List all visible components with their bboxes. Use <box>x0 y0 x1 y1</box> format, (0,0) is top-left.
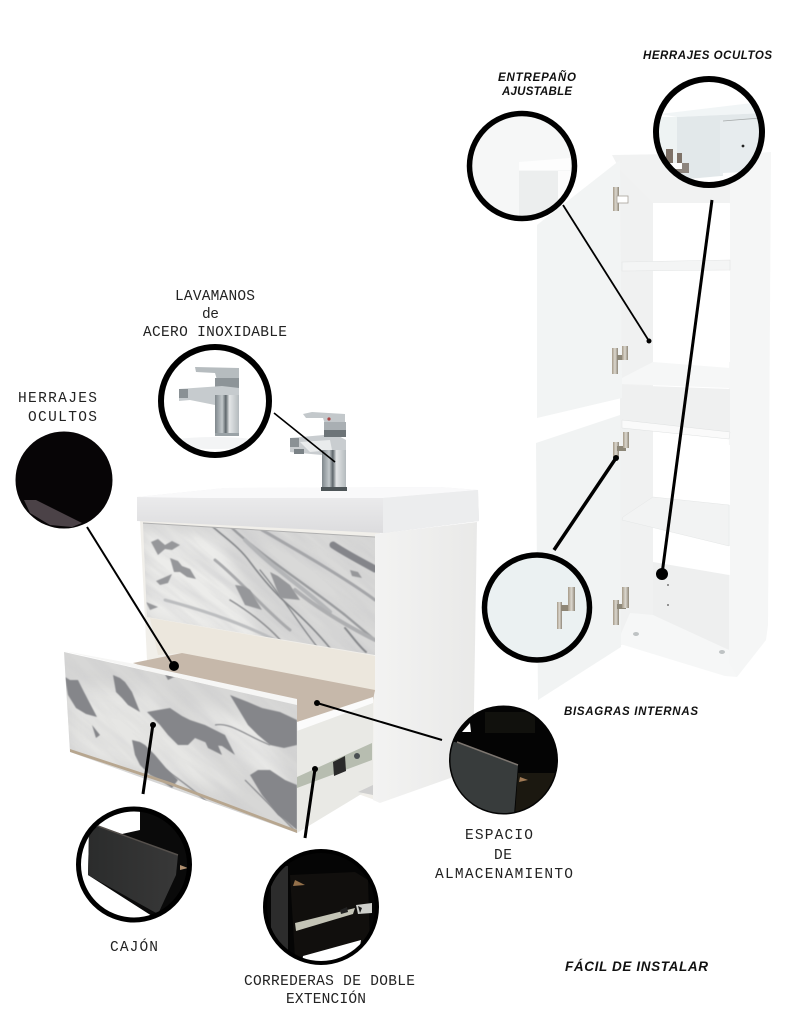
shelf two and box <box>620 362 730 439</box>
callout circle: slides <box>264 850 378 975</box>
leader line: faucet <box>274 413 335 462</box>
label: lavamanos: de <box>202 307 219 323</box>
open section cutouts <box>655 204 730 261</box>
drawer side with rail <box>297 703 373 833</box>
recess under upper drawer <box>150 618 375 692</box>
label: lavamanos: LAVAMANOS <box>175 289 255 305</box>
label: espacio de almacenamiento: DE <box>494 848 512 864</box>
leader line: drawer <box>143 722 156 794</box>
leader line: top hidden hardware <box>656 200 712 580</box>
lower door <box>536 415 621 700</box>
drawer front top edge <box>64 651 297 706</box>
upper door <box>537 160 622 418</box>
inner left panel <box>620 157 653 645</box>
cabinet side panel <box>373 522 477 803</box>
top shelf block <box>612 153 730 203</box>
label: entrepano ajustable: AJUSTABLE <box>501 86 572 98</box>
leader line: storage <box>314 700 442 740</box>
callout circle: hidden hardware, black <box>16 432 112 528</box>
label: lavamanos: ACERO INOXIDABLE <box>143 325 287 341</box>
leader line: adjustable shelf <box>563 205 652 344</box>
open drawer interior <box>133 653 375 722</box>
callout circle: adjustable shelf <box>470 114 578 221</box>
upper drawer edge shadow <box>143 523 375 537</box>
callout circle: internal hinges <box>484 555 590 660</box>
vanity cabinet <box>64 490 479 833</box>
shelf one <box>622 260 730 271</box>
label: cajon: CAJÓN <box>110 938 158 956</box>
faucet handle <box>303 412 345 430</box>
label: facil de instalar: FÁCIL DE INSTALAR <box>565 959 708 974</box>
faucet base <box>321 487 347 491</box>
callout circle: storage space <box>448 706 560 815</box>
upper marble drawer <box>143 524 375 655</box>
cabinet right side panel <box>728 152 771 677</box>
label: correderas: EXTENCIÓN <box>286 990 366 1008</box>
label: herrajes ocultos top: HERRAJES OCULTOS <box>643 50 772 62</box>
label: herrajes ocultos left: OCULTOS <box>28 410 97 426</box>
label: espacio de almacenamiento: ESPACIO <box>465 828 533 844</box>
label: bisagras internas: BISAGRAS INTERNAS <box>564 706 698 718</box>
cabinet left frame <box>140 520 380 800</box>
leader line: hidden hardware <box>87 527 179 671</box>
callout circle: hidden hardware, top <box>655 79 765 190</box>
cabinet floor <box>617 613 737 677</box>
faucet spout <box>290 434 346 456</box>
faucet body <box>322 450 346 488</box>
faucet <box>290 412 347 491</box>
label: correderas: CORREDERAS DE DOBLE <box>244 974 415 990</box>
callout circle: faucet <box>161 347 269 455</box>
leader line: slides <box>305 766 318 838</box>
sink basin <box>137 487 479 533</box>
hinges <box>612 187 629 625</box>
callout circle: drawer <box>76 800 190 930</box>
tall cabinet <box>536 152 771 700</box>
drawer rim <box>297 697 373 732</box>
lower marble drawer front <box>64 652 297 833</box>
lower back panel <box>653 562 729 650</box>
label: entrepano ajustable: ENTREPAÑO <box>498 71 576 84</box>
shelf three <box>622 497 729 546</box>
label: herrajes ocultos left: HERRAJES <box>18 391 97 407</box>
leader line: hinges <box>554 455 619 550</box>
label: espacio de almacenamiento: ALMACENAMIENTO <box>435 867 573 883</box>
